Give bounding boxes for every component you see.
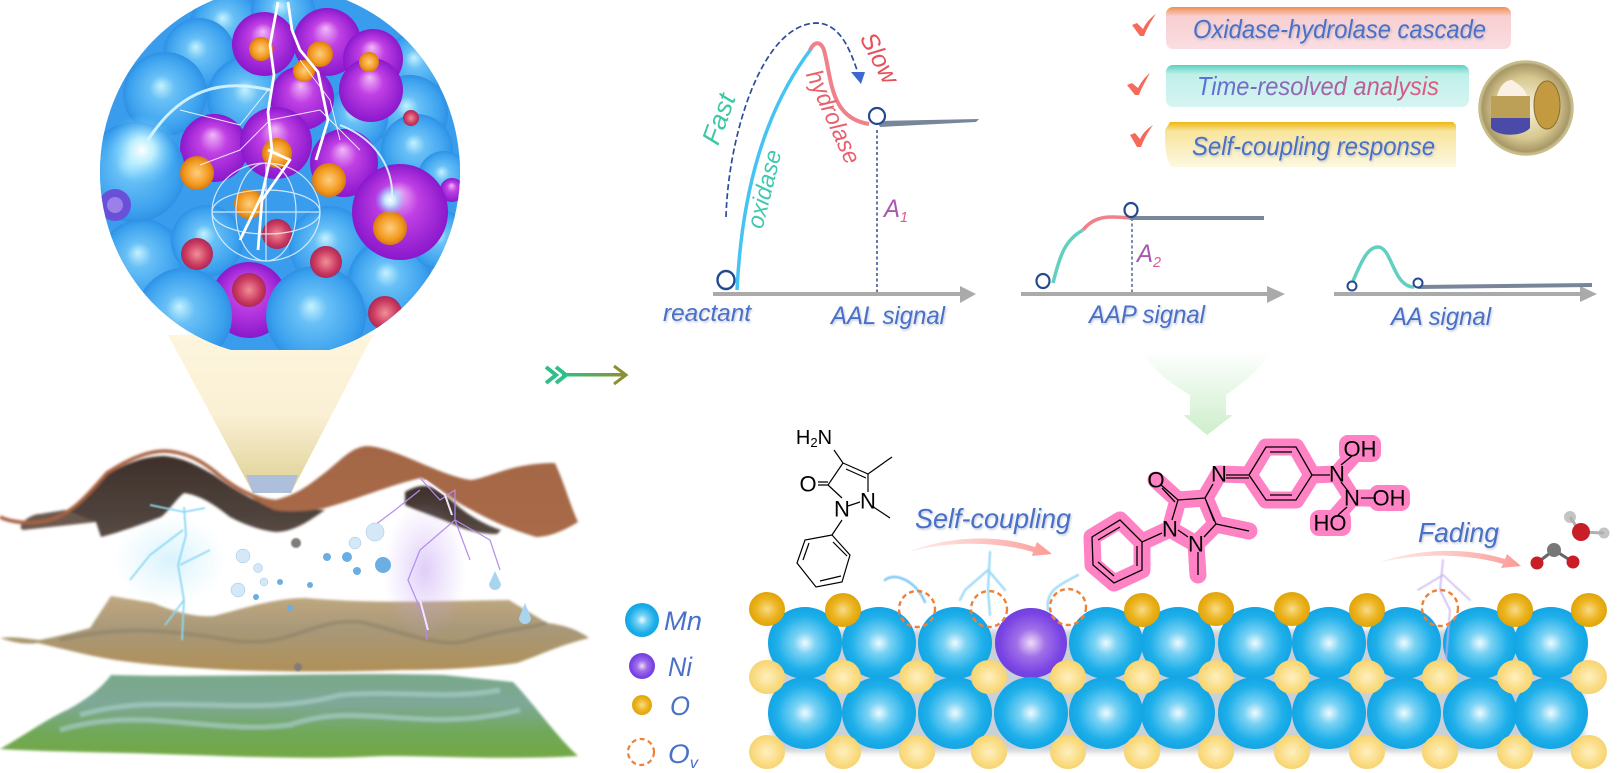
chart: AAL signal	[663, 23, 979, 330]
atom labels: OH	[1372, 486, 1406, 510]
molecule: 4-aminoantipyrine: O	[799, 472, 817, 496]
molecule: 4-aminoantipyrine: N	[834, 496, 850, 522]
Mn row 1	[768, 607, 1588, 679]
curve: pink plateau	[1083, 217, 1130, 230]
marker: product	[869, 108, 885, 124]
molecule: 4-aminoantipyrine: 2	[810, 434, 818, 450]
label: AAP signal: AAP signal	[1087, 301, 1206, 329]
plateau line	[877, 119, 979, 127]
feature: Oxidase-hydrolase cascade: Oxidase-hydrolase cascade	[1193, 14, 1486, 44]
atom labels: O	[1147, 468, 1165, 492]
atom labels: N	[1162, 516, 1178, 542]
bottom oxygen row	[749, 735, 1607, 769]
legend item: Mn	[625, 603, 702, 637]
atom labels	[1147, 436, 1406, 556]
icon: CO2 and H2O molecules	[1530, 511, 1610, 570]
atom labels: OH	[1344, 436, 1376, 462]
molecule: 4-aminoantipyrine: N	[860, 488, 876, 514]
molecule: 4-aminoantipyrine	[796, 427, 892, 587]
plateau line	[1130, 216, 1264, 220]
marker: end	[1124, 203, 1138, 217]
middle oxygen row	[749, 660, 1607, 694]
curve: teal rise	[1053, 230, 1083, 283]
plateau line	[1418, 283, 1592, 289]
molecule: 4-aminoantipyrine: H	[796, 427, 810, 449]
icon: blue lightning	[112, 505, 228, 640]
legend item: Ni	[629, 652, 693, 682]
marker: start	[1036, 274, 1050, 288]
feature: Oxidase-hydrolase cascade	[1166, 7, 1511, 49]
top oxygen row	[749, 592, 1607, 627]
dotted level A2	[1131, 218, 1133, 292]
Ni atom	[995, 608, 1067, 678]
icon: water droplets	[231, 523, 531, 671]
Mn row 2	[768, 677, 1588, 749]
ball shadows	[772, 630, 1584, 752]
icon: cosmetic jar	[1479, 61, 1573, 155]
atomic lattice surface	[749, 552, 1607, 769]
curve: hydrolase	[810, 43, 869, 124]
chart: AA signal	[1334, 247, 1597, 331]
surface lightning	[885, 552, 1470, 660]
atom labels: N	[1188, 532, 1204, 556]
layer: green bottom sheet	[0, 674, 578, 758]
label: hydrolase: hydrolase	[800, 66, 866, 168]
label: A1: 1	[900, 209, 908, 226]
curve: teal peak	[1353, 247, 1414, 287]
label: AAL signal: AAL signal	[829, 302, 946, 330]
feature: Self-coupling response	[1165, 122, 1456, 167]
label: A1: A	[884, 195, 901, 223]
legend item: O: O	[670, 691, 690, 721]
arrow: fading	[1378, 551, 1521, 568]
feature: Time-resolved analysis: Time-resolved analysis	[1197, 71, 1439, 101]
axis	[1021, 286, 1285, 303]
atom labels: N	[1344, 486, 1360, 510]
legend item: Ov: v	[690, 755, 699, 772]
marker: reactant	[718, 271, 734, 289]
chart: AAP signal	[1021, 203, 1285, 329]
icon: purple lightning	[375, 478, 500, 640]
axis	[1334, 286, 1597, 302]
axis	[713, 286, 976, 303]
label: A2: A	[1137, 240, 1154, 268]
arrow: dashed Fast to Slow	[726, 23, 865, 217]
legend item: Ni: Ni	[668, 652, 693, 682]
legend item: O	[632, 691, 690, 721]
atom labels: HO	[1314, 510, 1346, 536]
atom labels: N	[1329, 462, 1345, 486]
layer: tan middle sheet	[0, 596, 589, 672]
dotted level A1	[876, 130, 878, 292]
label: oxidase: oxidase	[742, 147, 787, 231]
oxygen vacancies	[899, 589, 1458, 627]
arrow: funnel down to reaction	[1141, 350, 1271, 435]
curve: oxidase	[737, 49, 811, 290]
feature: Time-resolved analysis	[1166, 65, 1469, 107]
check mark 3	[1130, 125, 1153, 147]
marker: start	[1348, 282, 1356, 290]
atom labels: N	[1211, 462, 1227, 486]
check mark 1	[1132, 14, 1156, 36]
feature: Self-coupling response: Self-coupling response	[1192, 131, 1435, 161]
check mark 2	[1127, 73, 1150, 95]
label: Slow: Slow	[854, 28, 905, 90]
arrow: self-coupling	[909, 539, 1052, 556]
molecule: 4-aminoantipyrine: N	[818, 427, 832, 449]
legend item: Ov	[628, 739, 699, 772]
legend item: Mn: Mn	[664, 606, 702, 636]
label: A2: 2	[1152, 254, 1162, 271]
layer: brown top sheet	[0, 446, 578, 537]
zoomed lattice circle	[100, 0, 460, 350]
legend item: Ov: O	[668, 739, 689, 769]
arrow: left panel to right panel	[546, 366, 626, 384]
feature list	[1127, 7, 1573, 167]
marker: end	[1414, 278, 1422, 288]
zoom cone	[168, 335, 373, 493]
label: reactant: reactant	[663, 300, 752, 327]
molecule: coupled product with pink highlight	[1092, 435, 1410, 583]
label: AA signal: AA signal	[1389, 303, 1492, 331]
bonds	[1092, 447, 1376, 583]
left panel: catalyst layers and zoomed lattice	[0, 0, 589, 758]
label: Fading: Fading	[1418, 517, 1499, 548]
label: Fast: Fast	[696, 88, 742, 148]
pink highlight	[1092, 447, 1388, 583]
label: Self-coupling: Self-coupling	[915, 503, 1071, 534]
legend	[625, 603, 702, 772]
